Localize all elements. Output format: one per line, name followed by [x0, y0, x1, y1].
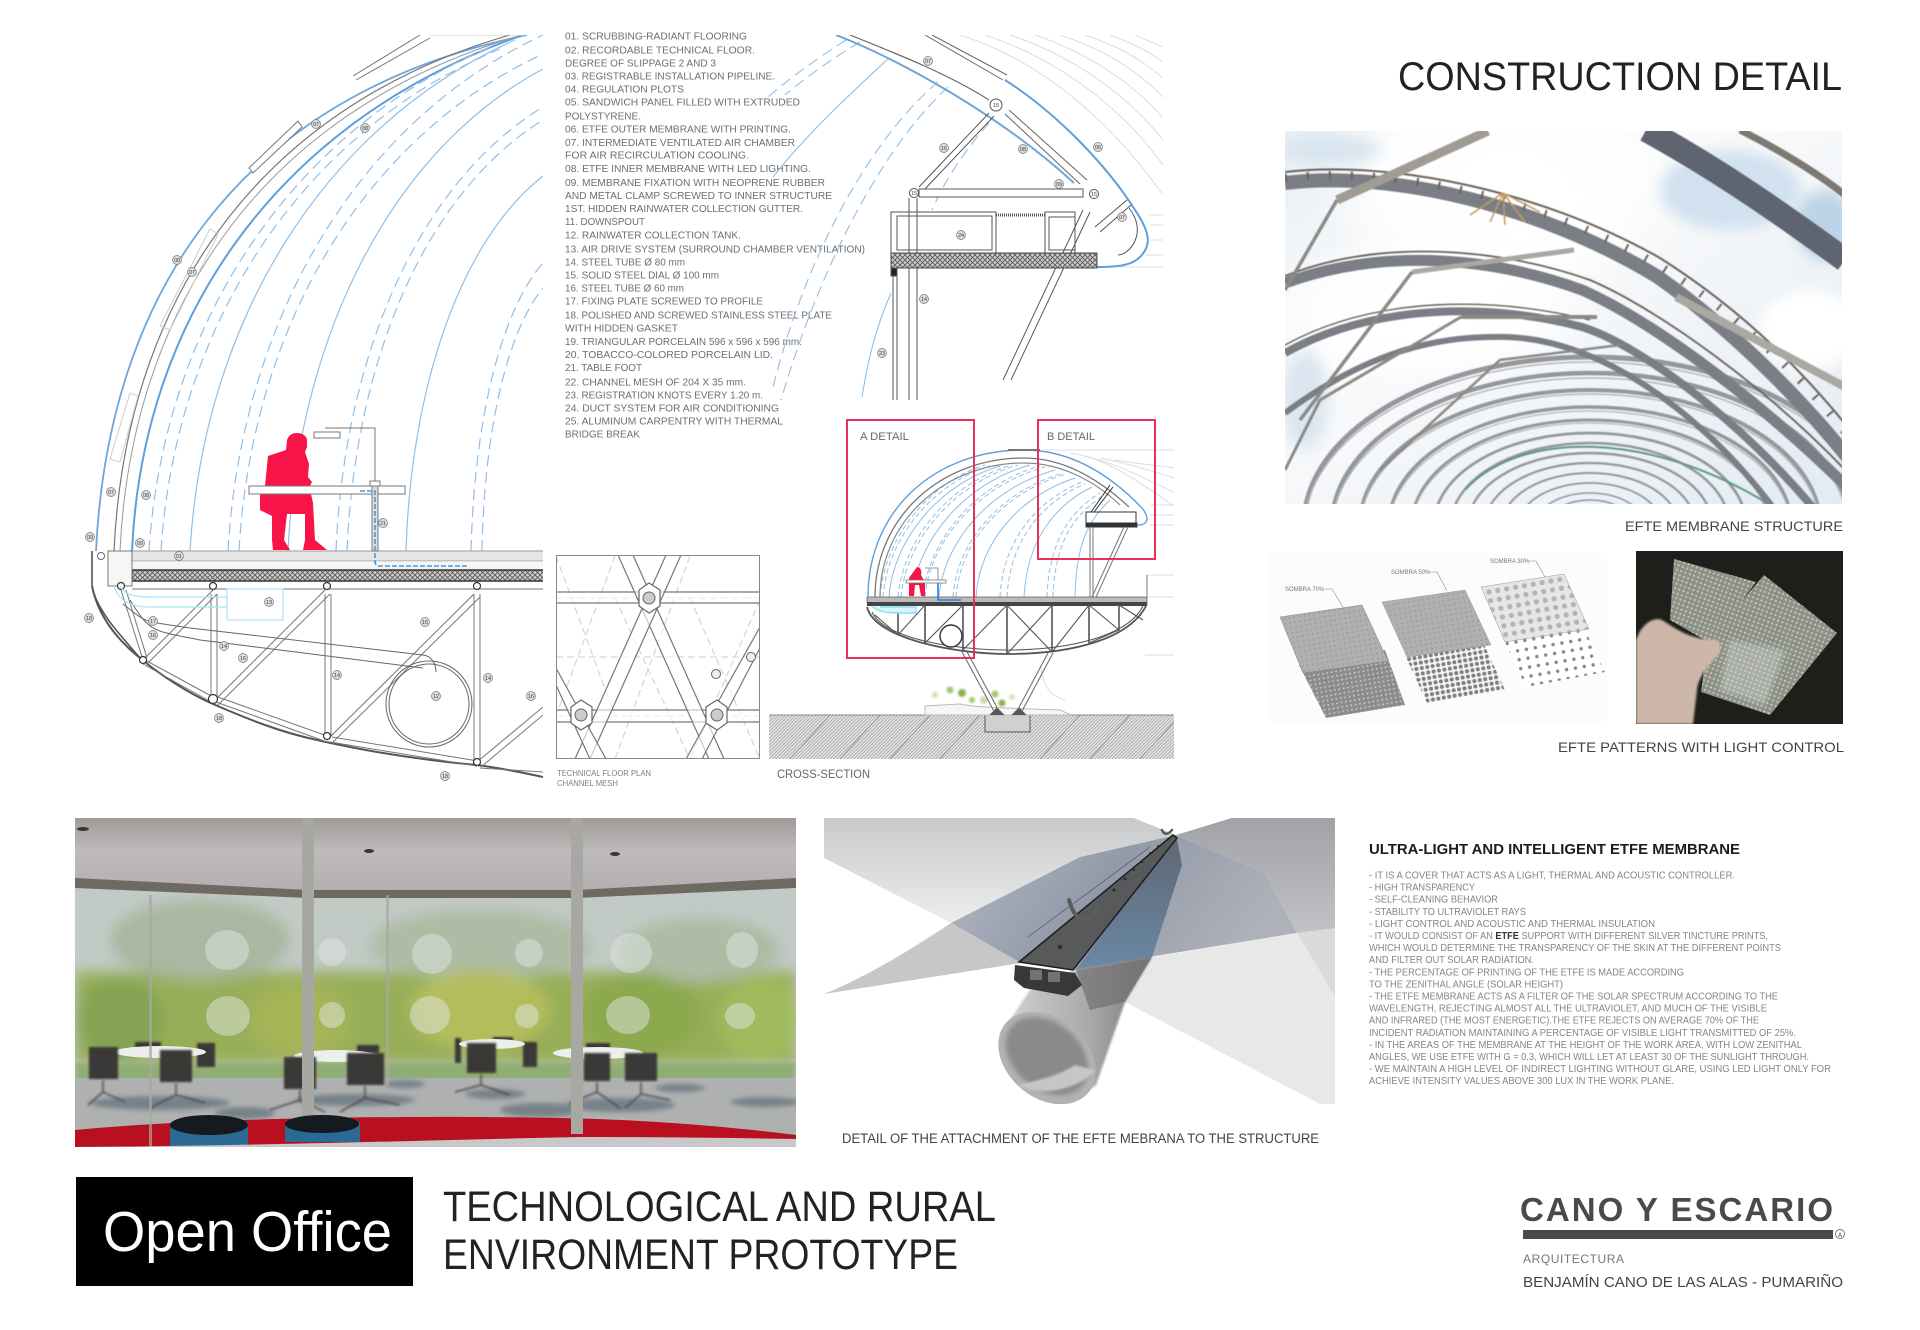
interior meridian lines — [768, 40, 989, 400]
detail marker numbers: 09 — [1056, 182, 1062, 188]
upper gallery — [1086, 485, 1137, 600]
project title: ENVIRONMENT PROTOTYPE — [443, 1231, 958, 1279]
dome membrane arcs — [96, 35, 543, 551]
channel bands — [556, 555, 760, 759]
aluminium profile — [1014, 835, 1177, 996]
HVAC duct line — [360, 491, 469, 566]
dome meridians — [880, 465, 1110, 597]
belly shell — [92, 586, 543, 777]
project badge: Open Office: Open Office — [103, 1200, 392, 1264]
detail marker numbers: 06 — [1095, 145, 1101, 151]
studio logo: CANO Y ESCARIO — [1520, 1191, 1833, 1228]
text block: ETFE membrane properties — [1369, 870, 1831, 1087]
legend list of construction elements: 05. SANDWICH PANEL FILLED WITH EXTRUDED — [565, 98, 800, 109]
steel arches — [1285, 130, 1850, 510]
legend list of construction elements: 1ST. HIDDEN RAINWATER COLLECTION GUTTER. — [565, 204, 803, 215]
project title: TECHNOLOGICAL AND RURAL — [443, 1183, 996, 1231]
legend list of construction elements: 02. RECORDABLE TECHNICAL FLOOR. — [565, 45, 755, 56]
callout number markers: 09 — [137, 541, 143, 547]
legend list of construction elements: 13. AIR DRIVE SYSTEM (SURROUND CHAMBER VENTILATION) — [565, 244, 865, 255]
shading planes — [824, 817, 1337, 1105]
callout number markers: 07 — [108, 490, 114, 496]
callout number markers: 07 — [189, 270, 195, 276]
legend list of construction elements: AND METAL CLAMP SCREWED TO INNER STRUCTURE — [565, 191, 832, 202]
legend list of construction elements: 11. DOWNSPOUT — [565, 217, 646, 228]
studio logo: A — [1838, 1233, 1843, 1239]
diagonal struts — [1285, 131, 1845, 470]
text block: ETFE membrane properties: - IN THE AREAS OF THE MEMBRANE AT THE HEIGHT OF THE WORK AREA, WITH LOW ZENITHAL — [1369, 1040, 1803, 1051]
text block: ETFE membrane properties: - IT WOULD CONSIST OF AN ETFE SUPPORT WITH DIFFERENT SILVER TINCTURE PRINTS, — [1369, 931, 1768, 942]
tunnel ribs — [1304, 357, 1876, 698]
seated person silhouette — [260, 433, 327, 550]
hex knots — [571, 583, 727, 730]
supporting legs — [961, 650, 1053, 715]
window columns — [149, 818, 583, 1147]
text block: ETFE membrane properties: - WE MAINTAIN A HIGH LEVEL OF INDIRECT LIGHTING WITHOUT GLARE, USING LED LIGHT ONLY FOR — [1369, 1064, 1831, 1075]
section marker: detail B frame: B DETAIL — [1047, 431, 1095, 443]
legend list of construction elements: 25. ALUMINUM CARPENTRY WITH THERMAL — [565, 416, 783, 427]
legend list of construction elements: 22. CHANNEL MESH OF 204 X 35 mm. — [565, 377, 746, 388]
text block: ETFE membrane properties: - SELF-CLEANING BEHAVIOR — [1369, 895, 1498, 906]
text block: ETFE membrane properties: - IT IS A COVER THAT ACTS AS A LIGHT, THERMAL AND ACOUSTIC CONTROLLER. — [1369, 870, 1735, 882]
callout number markers: 18 — [86, 616, 92, 622]
lawn — [75, 1063, 796, 1085]
legend list of construction elements: 19. TRIANGULAR PORCELAIN 596 x 596 x 596 mm. — [565, 337, 802, 348]
callout number markers: 07 — [313, 122, 319, 128]
callout number markers: 08 — [362, 126, 368, 132]
callout number markers: 16 — [422, 620, 428, 626]
table — [249, 428, 405, 551]
legend list of construction elements: 16. STEEL TUBE Ø 60 mm — [565, 284, 684, 295]
legend list of construction elements: 08. ETFE INNER MEMBRANE WITH LED LIGHTING. — [565, 164, 811, 175]
legend list of construction elements: 15. SOLID STEEL DIAL Ø 100 mm — [565, 271, 719, 282]
sheet pair 70 percent — [1280, 587, 1405, 718]
studio logo: BENJAMÍN CANO DE LAS ALAS - PUMARIÑO — [1523, 1274, 1843, 1291]
truss nodes — [118, 582, 480, 766]
floor plan caption — [557, 768, 651, 788]
section tank — [940, 625, 962, 647]
heading: construction detail: CONSTRUCTION DETAIL — [1398, 55, 1842, 99]
plants — [932, 686, 1015, 706]
foreground ledge — [75, 1137, 796, 1147]
meeting tables and chairs — [88, 1037, 670, 1112]
text block: ETFE membrane properties: AND FILTER OUT SOLAR RADIATION. — [1369, 955, 1534, 966]
text block: ETFE membrane properties: INCIDENT RADIATION MAINTAINING A PERCENTAGE OF VISIBLE LIGHT TRANSMITTED OF 25%. — [1369, 1028, 1796, 1039]
elevated floor and duct box — [891, 212, 1097, 276]
floor plan caption: CHANNEL MESH — [557, 778, 618, 788]
legend list of construction elements: 06. ETFE OUTER MEMBRANE WITH PRINTING. — [565, 125, 791, 136]
sheet pair 50 percent — [1382, 570, 1505, 703]
detail markers — [878, 56, 1126, 358]
background arcs — [1040, 450, 1174, 700]
callout number markers: 14 — [334, 673, 340, 679]
red carpet — [75, 1117, 796, 1147]
legend list of construction elements: 12. RAINWATER COLLECTION TANK. — [565, 230, 741, 241]
photo: hand holding printed film — [1636, 551, 1843, 724]
detail marker numbers: 15 — [1091, 192, 1097, 198]
photo: membrane structure — [1285, 131, 1842, 504]
legend list of construction elements: 18. POLISHED AND SCREWED STAINLESS STEEL PLATE — [565, 311, 832, 322]
structural tubes and nodes — [893, 99, 1137, 400]
legend list of construction elements: 17. FIXING PLATE SCREWED TO PROFILE — [565, 297, 763, 308]
callout number markers: 13 — [266, 600, 272, 606]
photo: interior with meeting tables — [75, 818, 800, 1147]
legend list of construction elements: WITH HIDDEN GASKET — [565, 324, 679, 335]
section drawing: detail B — [768, 35, 1163, 400]
legend list of construction elements: 04. REGULATION PLOTS — [565, 85, 684, 96]
sheet pair 30 percent: SOMBRA 30% — [1490, 559, 1530, 565]
cross-section caption: CROSS-SECTION — [777, 769, 870, 781]
legend list of construction elements: 24. DUCT SYSTEM FOR AIR CONDITIONING — [565, 403, 779, 414]
translucent bubbles — [205, 930, 758, 1036]
truss and belly — [867, 604, 1147, 654]
outer and inner membranes — [836, 35, 1148, 267]
text block: ETFE membrane properties: ANGLES, WE USE ETFE WITH G = 0.3, WHICH WILL LET AT LEAST 30 OF THE SUNLIGHT THROUGH. — [1369, 1052, 1809, 1063]
detail marker numbers: 23 — [879, 351, 885, 357]
caption: attachment detail: DETAIL OF THE ATTACHMENT OF THE EFTE MEBRANA TO THE STRUCTURE — [842, 1131, 1319, 1146]
main floor slab — [867, 575, 1147, 606]
callout number markers: 14 — [221, 644, 227, 650]
callout number markers: 18 — [442, 774, 448, 780]
sheet pair 70 percent: SOMBRA 70% — [1285, 587, 1325, 593]
outer membrane panels — [110, 35, 525, 462]
section drawing: detail A — [92, 35, 552, 777]
heading: ETFE membrane: ULTRA-LIGHT AND INTELLIGENT ETFE MEMBRANE — [1369, 841, 1740, 858]
project badge: Open Office — [76, 1177, 413, 1286]
section marker: detail A frame: A DETAIL — [860, 431, 909, 443]
callout number markers: 18 — [216, 716, 222, 722]
callout number markers: 12 — [433, 694, 439, 700]
tube — [980, 957, 1152, 1123]
callout number markers: 16 — [240, 656, 246, 662]
legend list of construction elements: FOR AIR RECIRCULATION COOLING. — [565, 151, 749, 162]
text block: ETFE membrane properties: WHICH WOULD DETERMINE THE TRANSPARENCY OF THE SKIN AT THE DIFFERENT POINTS — [1369, 943, 1782, 954]
callout number markers — [84, 120, 536, 780]
callout number markers: 16 — [150, 633, 156, 639]
technical floor — [92, 551, 552, 658]
callout number markers: 16 — [528, 694, 534, 700]
callout number markers: 09 — [87, 535, 93, 541]
text block: ETFE membrane properties: - THE PERCENTAGE OF PRINTING OF THE ETFE IS MADE ACCORDING — [1369, 967, 1684, 978]
floor plan caption: TECHNICAL FLOOR PLAN — [557, 768, 651, 778]
detail marker numbers: 07 — [1119, 215, 1125, 221]
tree line — [75, 900, 800, 1064]
detail marker numbers: 14 — [921, 297, 927, 303]
section air duct — [872, 606, 916, 613]
caption: membrane structure: EFTE MEMBRANE STRUCTURE — [1625, 519, 1843, 534]
render: membrane attachment detail — [824, 817, 1337, 1123]
detail marker numbers: 15 — [993, 103, 999, 109]
callout number markers: 14 — [485, 676, 491, 682]
legend list of construction elements: 03. REGISTRABLE INSTALLATION PIPELINE. — [565, 71, 775, 82]
text block: ETFE membrane properties: - LIGHT CONTROL AND ACOUSTIC AND THERMAL INSULATION — [1369, 919, 1655, 930]
legend list of construction elements: POLYSTYRENE. — [565, 112, 641, 123]
legend list of construction elements — [565, 31, 865, 440]
sheet pair 30 percent — [1481, 559, 1605, 687]
detail marker numbers: 07 — [925, 59, 931, 65]
ceiling — [75, 818, 796, 893]
foundation — [985, 715, 1030, 732]
text block: ETFE membrane properties: - HIGH TRANSPARENCY — [1369, 883, 1476, 894]
sun flare — [1470, 193, 1540, 225]
text block: ETFE membrane properties: TO THE ZENITHAL ANGLE (SOLAR HEIGHT) — [1369, 979, 1563, 990]
project title — [443, 1183, 996, 1279]
small person and desk — [906, 567, 961, 600]
air drive system duct — [114, 586, 283, 620]
studio logo — [1520, 1191, 1844, 1291]
text block: ETFE membrane properties: - THE ETFE MEMBRANE ACTS AS A FILTER OF THE SOLAR SPECTRUM ACCORDING TO THE — [1369, 992, 1779, 1002]
text block: ETFE membrane properties: WAVELENGTH, REJECTING ALMOST ALL THE ULTRAVIOLET, AND MUCH OF THE VISIBLE — [1369, 1004, 1768, 1015]
caption: patterns: EFTE PATTERNS WITH LIGHT CONTROL — [1558, 739, 1844, 755]
detail marker numbers: 08 — [1020, 147, 1026, 153]
floor — [75, 1078, 796, 1138]
rainwater tank and drain pipes — [123, 600, 472, 747]
blue stools — [170, 1115, 360, 1147]
sheet pair 50 percent: SOMBRA 50% — [1391, 570, 1431, 576]
technical floor plan — [556, 555, 760, 759]
secondary dashed mesh — [556, 556, 760, 759]
text block: ETFE membrane properties: AND INFRARED (THE MOST ENERGETIC).THE ETFE REJECTS ON AVERAGE 70% OF THE — [1369, 1016, 1759, 1027]
legend list of construction elements: 21. TABLE FOOT — [565, 363, 643, 374]
text block: ETFE membrane properties: ACHIEVE INTENSITY VALUES ABOVE 300 LUX IN THE WORK PLANE. — [1369, 1076, 1674, 1087]
section marker: detail A frame — [847, 420, 974, 658]
clamps — [1069, 830, 1172, 920]
floor shadows — [90, 1080, 800, 1119]
detail marker numbers — [879, 59, 1125, 357]
legend list of construction elements: DEGREE OF SLIPPAGE 2 AND 3 — [565, 58, 716, 69]
legend list of construction elements: 09. MEMBRANE FIXATION WITH NEOPRENE RUBBER — [565, 178, 825, 189]
legend list of construction elements: BRIDGE BREAK — [565, 429, 640, 440]
callout number markers: 21 — [380, 521, 386, 527]
text block: ETFE membrane properties: - STABILITY TO ULTRAVIOLET RAYS — [1369, 907, 1527, 918]
dome shell — [868, 450, 1147, 597]
legend list of construction elements: 23. REGISTRATION KNOTS EVERY 1.20 m. — [565, 390, 763, 401]
studio logo: ARQUITECTURA — [1523, 1252, 1624, 1266]
legend list of construction elements: 14. STEEL TUBE Ø 80 mm — [565, 258, 685, 269]
background shell arcs — [960, 35, 1163, 267]
detail marker numbers: 16 — [941, 146, 947, 152]
legend list of construction elements: 01. SCRUBBING-RADIANT FLOORING — [565, 31, 747, 42]
truss tubes — [121, 590, 543, 772]
callout number markers: 08 — [174, 258, 180, 264]
ground — [769, 715, 1174, 759]
callout number markers: 01 — [176, 554, 182, 560]
detail marker numbers: 15 — [911, 191, 917, 197]
planting mound — [925, 704, 1071, 715]
legend list of construction elements: 07. INTERMEDIATE VENTILATED AIR CHAMBER — [565, 138, 795, 149]
pattern diagram: shade sheets — [1270, 553, 1607, 722]
green stripe — [1465, 447, 1770, 505]
callout number markers: 17 — [150, 619, 156, 625]
cross-section drawing — [769, 450, 1174, 759]
detail marker numbers: 24 — [958, 233, 964, 239]
callout number markers: 08 — [143, 493, 149, 499]
legend list of construction elements: 20. TOBACCO-COLORED PORCELAIN LID. — [565, 350, 773, 361]
section marker: detail B frame — [1038, 420, 1155, 559]
